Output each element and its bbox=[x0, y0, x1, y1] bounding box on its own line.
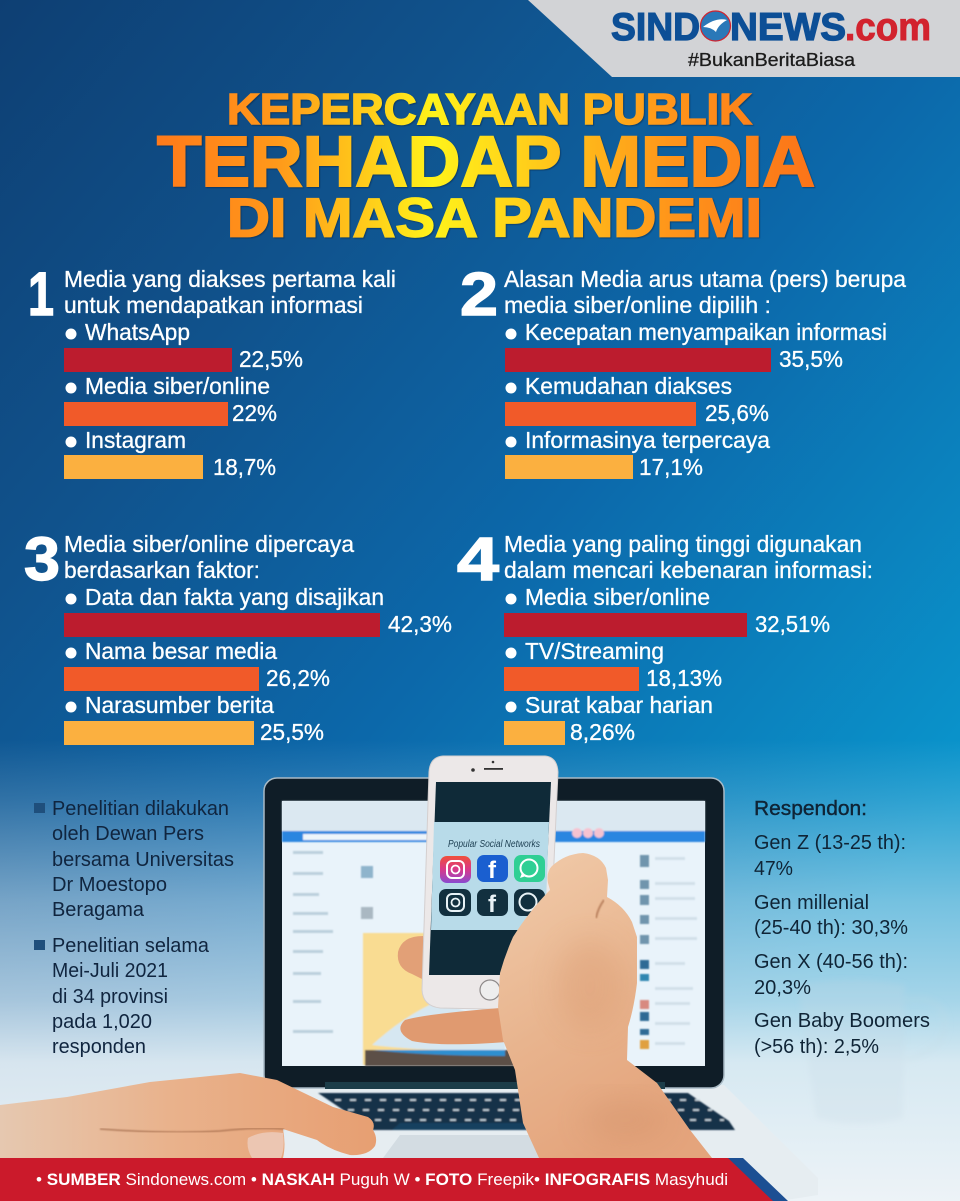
panel 3: trust factors bbox=[24, 525, 452, 745]
item: Surat kabar harian: Surat kabar harian bbox=[525, 692, 713, 718]
title: TERHADAP MEDIA bbox=[157, 123, 815, 202]
respondents right: 47% bbox=[754, 858, 793, 880]
logo: Sindonews.com: SIND bbox=[611, 6, 700, 49]
note 1: Dr Moestopo bbox=[52, 874, 167, 896]
note 2: di 34 provinsi bbox=[52, 986, 168, 1008]
item: Media siber/online bbox=[64, 373, 277, 426]
item: Nama besar media: 26,2% bbox=[266, 665, 330, 691]
illustration: laptop with hands and phone bbox=[0, 756, 818, 1201]
laptop lid bbox=[264, 778, 724, 1088]
respondents right: Gen X (40-56 th): bbox=[754, 951, 908, 973]
footer credits: • SUMBER Sindonews.com • NASKAH Puguh W • FOTO Freepik• INFOGRAFIS Masyhudi bbox=[36, 1171, 728, 1189]
note 2 bbox=[34, 935, 210, 1058]
logo: Sindonews.com bbox=[611, 6, 931, 49]
heading 4: dalam mencari kebenaran informasi: bbox=[504, 557, 873, 583]
phone screen bbox=[429, 782, 551, 975]
item: Data dan fakta: 42,3% bbox=[388, 611, 452, 637]
item: Terpercaya bbox=[505, 427, 770, 480]
icon: coffee cup in background bbox=[798, 980, 945, 1124]
item: Surat kabar harian: 8,26% bbox=[570, 719, 635, 745]
item: WhatsApp: WhatsApp bbox=[85, 319, 190, 345]
item: WhatsApp: 22,5% bbox=[239, 346, 303, 372]
item: Media siber/online: 22% bbox=[232, 400, 277, 426]
panel 4: media used to seek truth bbox=[457, 525, 873, 745]
respondents right: (>56 th): 2,5% bbox=[754, 1036, 879, 1058]
number 4: 4 bbox=[457, 525, 499, 593]
laptop hinge bbox=[325, 1082, 665, 1089]
laptop base bbox=[280, 1085, 818, 1201]
heading 3: Media siber/online dipercaya bbox=[64, 531, 354, 557]
respondents right: Gen Z (13-25 th): bbox=[754, 832, 906, 854]
item: Narasumber berita: Narasumber berita bbox=[85, 692, 274, 718]
item: Nama besar media bbox=[64, 638, 330, 691]
item: Terpercaya: 17,1% bbox=[639, 454, 703, 480]
note 1: Beragama bbox=[52, 899, 145, 921]
note 2: Penelitian selama bbox=[52, 935, 210, 957]
note 2: responden bbox=[52, 1036, 146, 1058]
item: TV/Streaming bbox=[504, 638, 722, 691]
respondents right: Gen Baby Boomers bbox=[754, 1010, 930, 1032]
title: KEPERCAYAAN PUBLIK bbox=[227, 85, 752, 134]
item: TV/Streaming: TV/Streaming bbox=[525, 638, 664, 664]
phone speaker and camera bbox=[471, 761, 503, 772]
app icons: f bbox=[488, 857, 497, 884]
title bbox=[157, 85, 815, 248]
respondents right: Respendon: bbox=[754, 798, 867, 820]
title: DI MASA PANDEMI bbox=[227, 186, 762, 248]
item: Kecepatan: Kecepatan menyampaikan informasi bbox=[525, 319, 887, 345]
item: Narasumber berita bbox=[64, 692, 324, 745]
heading 3: berdasarkan faktor: bbox=[64, 557, 260, 583]
note 2: Mei-Juli 2021 bbox=[52, 960, 168, 982]
header logo banner bbox=[528, 0, 960, 77]
tagline: #BukanBeritaBiasa bbox=[688, 50, 856, 70]
laptop keyboard bbox=[318, 1093, 735, 1130]
note 1: Penelitian dilakukan bbox=[52, 798, 229, 820]
note 1 bbox=[34, 798, 234, 921]
item: Kemudahan: Kemudahan diakses bbox=[525, 373, 732, 399]
phone home button bbox=[480, 980, 500, 1000]
right hand lower finger bbox=[400, 1008, 507, 1044]
app icons: f bbox=[488, 891, 497, 918]
right hand bbox=[498, 853, 712, 1158]
note 1: oleh Dewan Pers bbox=[52, 823, 204, 845]
phone bbox=[422, 756, 558, 1010]
item: Terpercaya: Informasinya terpercaya bbox=[525, 427, 770, 453]
number 1: 1 bbox=[28, 260, 54, 328]
respondents right: 20,3% bbox=[754, 977, 811, 999]
phone label: Popular Social Networks bbox=[448, 839, 540, 850]
item: Instagram: 18,7% bbox=[213, 454, 276, 480]
number 3: 3 bbox=[24, 525, 60, 593]
left hand bbox=[0, 1073, 376, 1158]
logo: Sindonews.com: .com bbox=[845, 6, 931, 49]
logo: Sindonews.com: NEWS bbox=[730, 6, 846, 49]
heading 4: Media yang paling tinggi digunakan bbox=[504, 531, 862, 557]
research notes left bbox=[34, 798, 234, 1058]
item: Kecepatan bbox=[505, 319, 887, 372]
item: Media siber/online: Media siber/online bbox=[525, 584, 710, 610]
item: Kecepatan: 35,5% bbox=[779, 346, 843, 372]
respondents right: (25-40 th): 30,3% bbox=[754, 917, 908, 939]
item: Narasumber berita: 25,5% bbox=[260, 719, 324, 745]
item: Surat kabar harian bbox=[504, 692, 713, 745]
item: TV/Streaming: 18,13% bbox=[646, 665, 722, 691]
item: Media siber/online bbox=[504, 584, 830, 637]
item: Kemudahan: 25,6% bbox=[705, 400, 769, 426]
item: Nama besar media: Nama besar media bbox=[85, 638, 277, 664]
laptop screen bbox=[282, 801, 705, 1066]
item: Data dan fakta: Data dan fakta yang disajikan bbox=[85, 584, 384, 610]
panel 1: first accessed media bbox=[28, 260, 396, 480]
right hand finger behind phone bbox=[398, 936, 428, 982]
item: Instagram: Instagram bbox=[85, 427, 186, 453]
item: Kemudahan bbox=[505, 373, 769, 426]
item: Instagram bbox=[64, 427, 276, 480]
item: WhatsApp bbox=[64, 319, 303, 372]
heading 2: Alasan Media arus utama (pers) berupa bbox=[504, 266, 906, 292]
heading 1: untuk mendapatkan informasi bbox=[64, 292, 363, 318]
respondents right: Gen millenial bbox=[754, 892, 869, 914]
laptop trackpad bbox=[383, 1135, 545, 1158]
item: Media siber/online: Media siber/online bbox=[85, 373, 270, 399]
note 2: pada 1,020 bbox=[52, 1011, 152, 1033]
left thumb nail bbox=[248, 1132, 284, 1158]
heading 2: media siber/online dipilih : bbox=[504, 292, 771, 318]
footer credits bbox=[0, 1158, 788, 1201]
note 1: bersama Universitas bbox=[52, 849, 234, 871]
item: Media siber/online: 32,51% bbox=[755, 611, 830, 637]
number 2: 2 bbox=[460, 260, 498, 328]
panel 2: reasons for choosing online press bbox=[460, 260, 906, 480]
heading 1: Media yang diakses pertama kali bbox=[64, 266, 396, 292]
app icons bbox=[439, 855, 545, 918]
item: Data dan fakta bbox=[64, 584, 452, 637]
